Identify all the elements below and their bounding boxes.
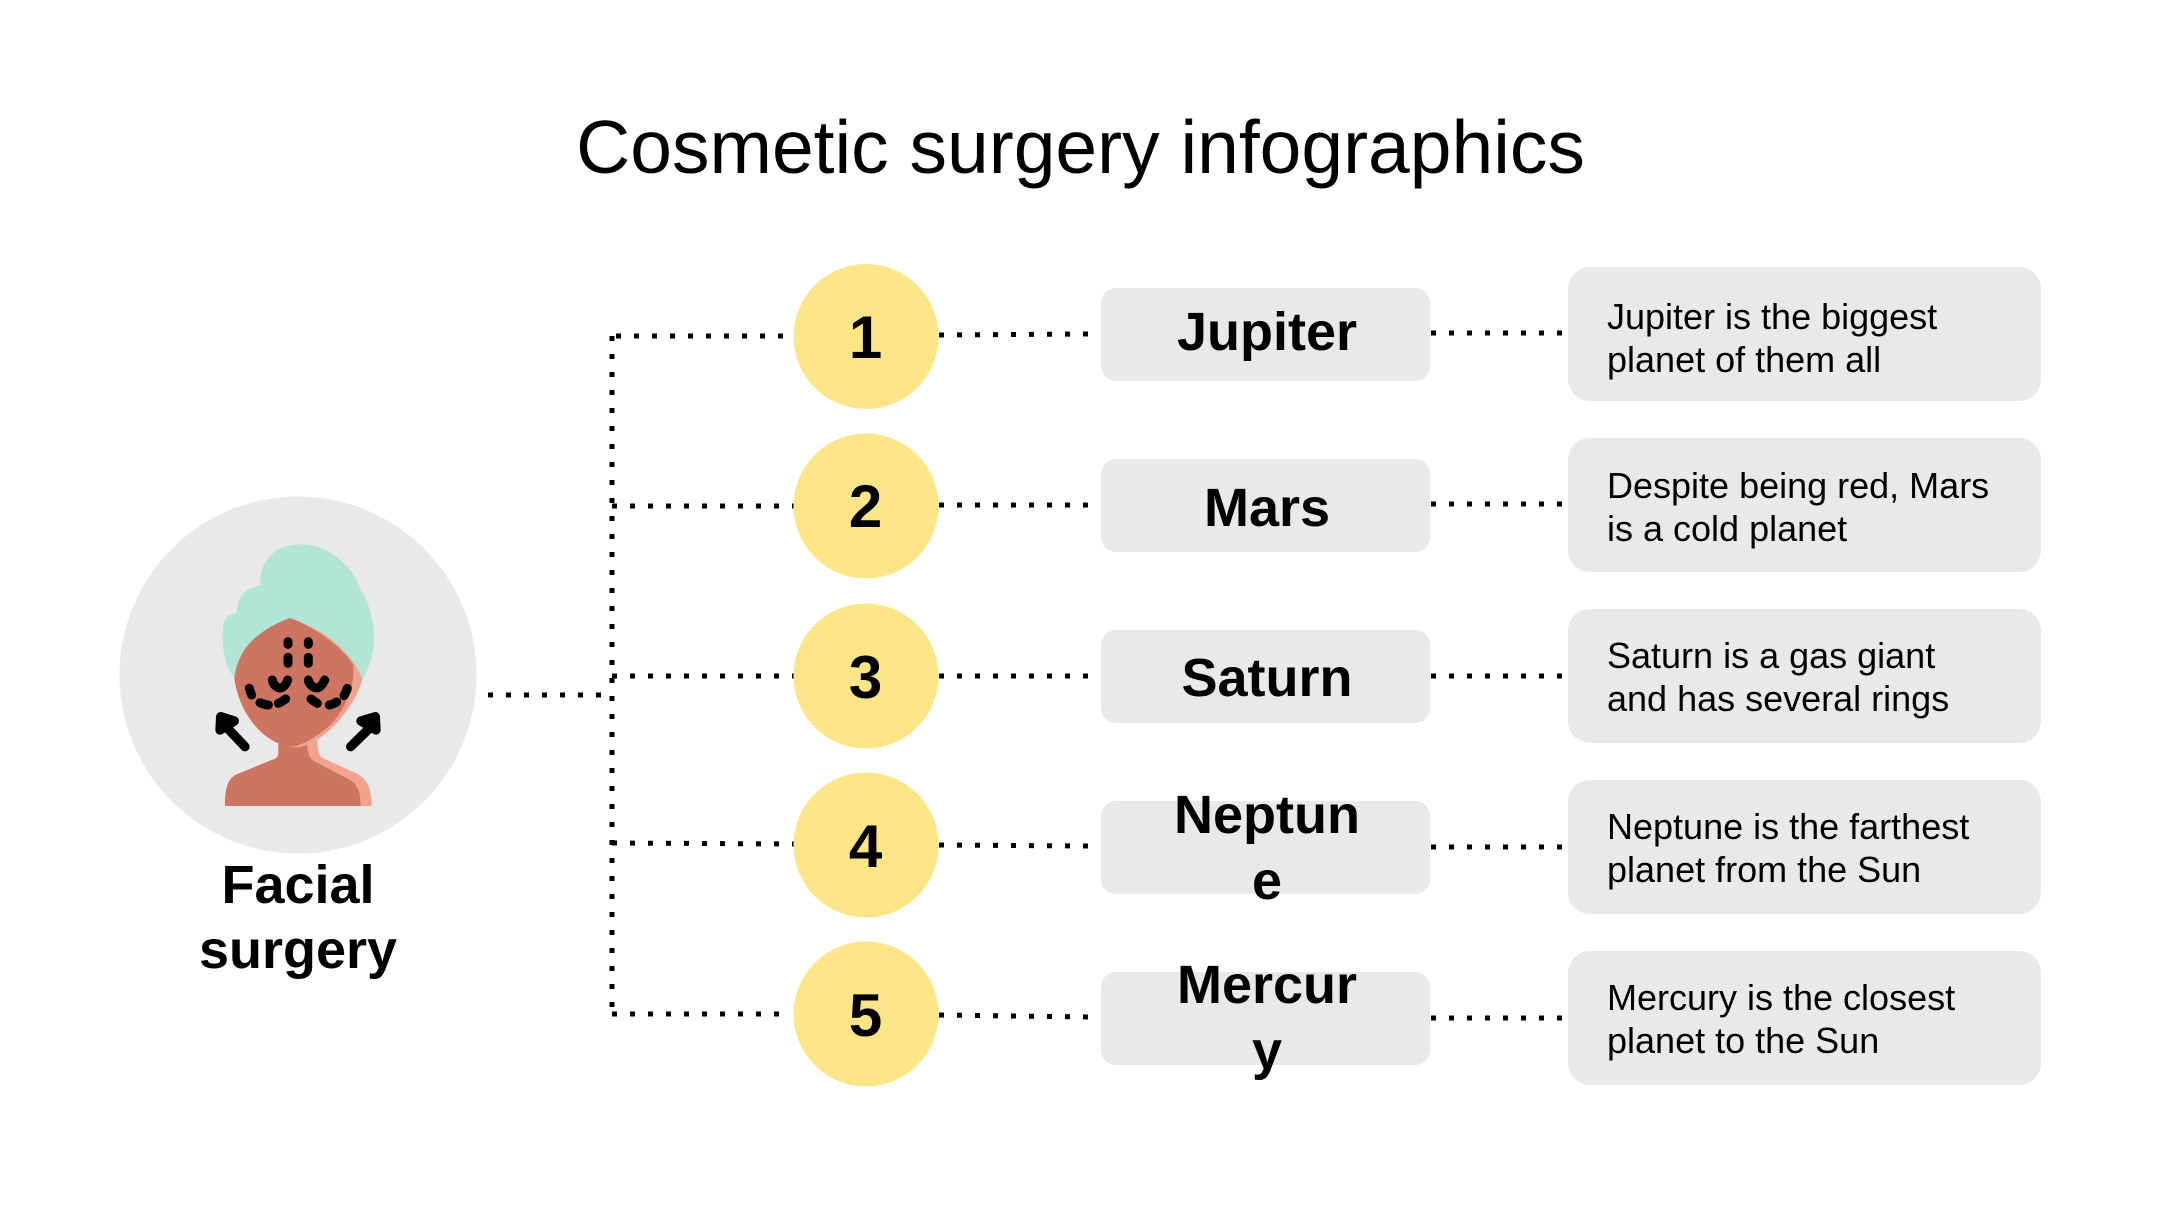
face xyxy=(234,618,353,747)
name: Neptun xyxy=(1174,785,1360,845)
description: planet of them all xyxy=(1607,339,1881,380)
connector xyxy=(939,334,1090,335)
description box xyxy=(1568,267,2041,401)
number circle xyxy=(794,942,938,1086)
number: 5 xyxy=(849,982,882,1049)
number circle xyxy=(794,772,938,918)
arrow left xyxy=(220,717,245,747)
connector xyxy=(939,1015,1090,1017)
description: planet to the Sun xyxy=(1607,1020,1879,1061)
surgery marks xyxy=(249,642,347,705)
name: y xyxy=(1252,1021,1282,1081)
row 1 xyxy=(616,264,2041,409)
connector xyxy=(612,843,794,844)
number: 4 xyxy=(849,813,883,880)
name box xyxy=(1101,972,1430,1065)
description: and has several rings xyxy=(1607,678,1949,719)
facial surgery label: Facial xyxy=(221,855,375,915)
connector xyxy=(612,504,794,508)
connector xyxy=(1431,1016,1564,1020)
body highlight xyxy=(225,735,372,806)
connector xyxy=(939,845,1090,846)
facial surgery circle xyxy=(120,496,476,854)
towel xyxy=(223,544,374,697)
connector: trunk lines xyxy=(488,336,612,1016)
name box xyxy=(1101,288,1430,381)
description: Neptune is the farthest xyxy=(1607,806,1969,847)
number circle xyxy=(794,264,938,409)
description: is a cold planet xyxy=(1607,508,1847,549)
number: 2 xyxy=(849,473,882,540)
name: Saturn xyxy=(1181,648,1353,708)
number circle xyxy=(794,434,938,578)
description box xyxy=(1568,438,2041,572)
name: Mercur xyxy=(1177,955,1357,1015)
icon: woman with towel and surgery marks xyxy=(220,544,376,806)
connector xyxy=(1431,502,1564,506)
name box xyxy=(1101,630,1430,723)
title: Cosmetic surgery infographics xyxy=(576,105,1585,189)
description: Despite being red, Mars xyxy=(1607,465,1989,506)
name box xyxy=(1101,801,1430,894)
name: Jupiter xyxy=(1177,302,1357,362)
connector xyxy=(612,674,794,678)
panel: facial surgery: surgery xyxy=(199,920,397,980)
row 3 xyxy=(612,604,2041,748)
row 2 xyxy=(612,434,2041,578)
name: Mars xyxy=(1204,478,1330,538)
connector xyxy=(616,334,790,338)
connector xyxy=(612,1012,790,1016)
arrow right xyxy=(351,717,376,747)
number: 3 xyxy=(849,644,882,711)
name: e xyxy=(1252,851,1282,911)
connector xyxy=(939,502,1090,508)
panel: facial surgery xyxy=(120,496,476,980)
description: Jupiter is the biggest xyxy=(1607,296,1937,337)
description box xyxy=(1568,951,2041,1085)
description: Saturn is a gas giant xyxy=(1607,635,1935,676)
number circle xyxy=(794,604,938,748)
description: Mercury is the closest xyxy=(1607,977,1955,1018)
row 5 xyxy=(612,942,2041,1086)
description: planet from the Sun xyxy=(1607,849,1921,890)
connector xyxy=(939,674,1090,678)
face highlight xyxy=(234,618,362,747)
description box xyxy=(1568,780,2041,914)
description box xyxy=(1568,609,2041,743)
body xyxy=(225,740,361,806)
connector xyxy=(1431,674,1564,678)
connector xyxy=(1431,844,1564,850)
row 4 xyxy=(612,772,2041,918)
number: 1 xyxy=(849,304,882,371)
connector xyxy=(1431,330,1564,336)
name box xyxy=(1101,459,1430,552)
